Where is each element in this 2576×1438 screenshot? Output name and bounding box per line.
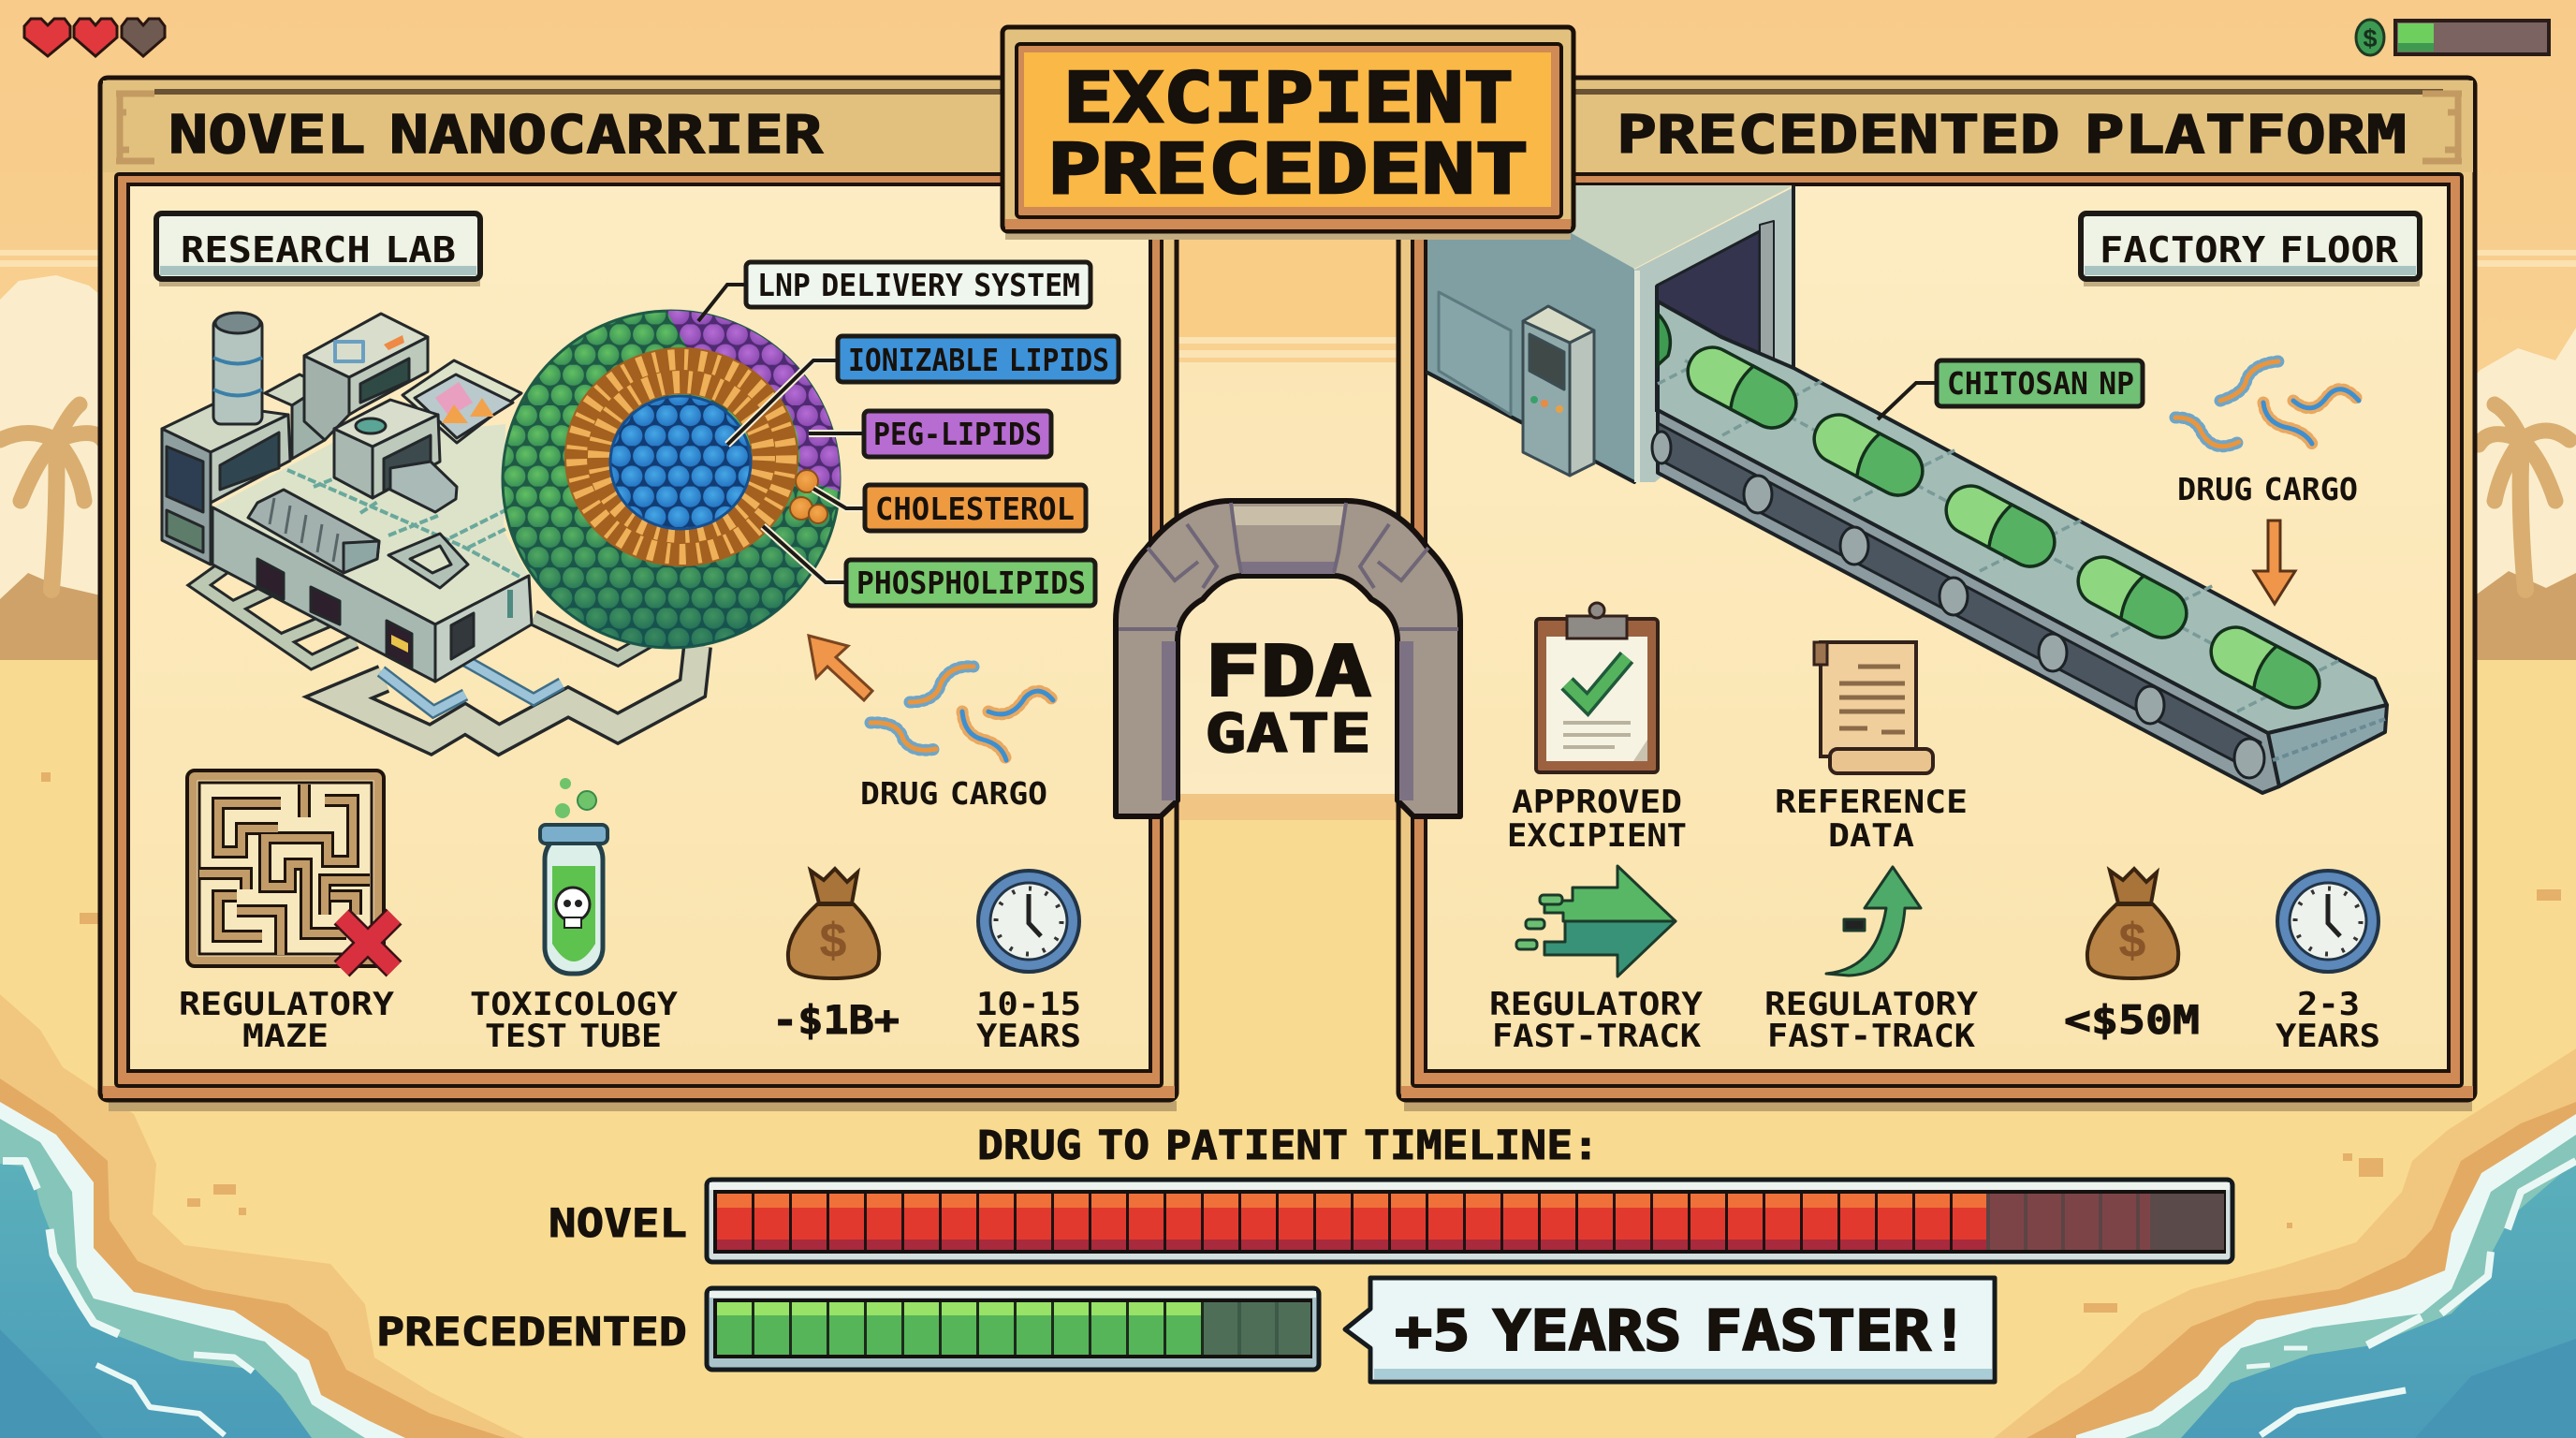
coast: bottom-right sea xyxy=(1994,1049,2576,1438)
heading: timeline: DRUG TO PATIENT TIMELINE: xyxy=(977,1123,1599,1169)
illustration: factory building xyxy=(1427,185,1793,482)
icon: approved excipient clipboard xyxy=(1536,603,1658,772)
control cabinet xyxy=(1523,306,1594,476)
badge: factory floor: FACTORY FLOOR xyxy=(2100,229,2398,271)
label: 10-15 years xyxy=(976,986,1081,1055)
callout: years faster: +5 YEARS FASTER! xyxy=(1395,1299,1969,1364)
icon: reference data scroll xyxy=(1814,642,1933,773)
label: cholesterol: CHOLESTEROL xyxy=(875,491,1075,527)
label: chitosan NP with leader: CHITOSAN NP xyxy=(1947,365,2134,402)
timeline bar: precedented xyxy=(707,1288,1319,1370)
leader lines: LNP labels xyxy=(698,285,865,582)
icon: drug cargo DNA (left) xyxy=(871,667,1053,760)
callout: years faster xyxy=(1345,1278,1995,1382)
panel: precedented platform xyxy=(1398,78,2475,1111)
label: approved excipient: EXCIPIENT xyxy=(1507,817,1687,855)
label: PEG-lipids: PEG-LIPIDS xyxy=(873,416,1042,452)
gate label xyxy=(1205,630,1371,765)
illustration: isometric research lab xyxy=(162,313,697,740)
label: cost novel: -$1B+ xyxy=(772,997,900,1043)
label: regulatory fast-track 1: REGULATORY xyxy=(1489,986,1704,1023)
label: drug cargo (left): DRUG CARGO xyxy=(860,775,1047,812)
HUD: energy bar: $ xyxy=(2363,24,2378,52)
gate label: GATE xyxy=(1205,703,1371,765)
illustration: LNP sphere xyxy=(503,311,840,648)
label: novel row: NOVEL xyxy=(549,1200,687,1246)
HUD: hearts xyxy=(24,19,165,56)
label: approved excipient: APPROVED xyxy=(1512,784,1682,821)
lab pipes xyxy=(199,564,697,740)
label: toxicology test tube xyxy=(470,986,679,1055)
conveyor pills: chitosan NP xyxy=(1658,314,2328,716)
icon: drug cargo DNA (right) xyxy=(2175,361,2359,447)
badge: research lab: RESEARCH LAB xyxy=(181,229,456,271)
label: reference data xyxy=(1775,784,1968,855)
heading: precedented platform: PRECEDENTED PLATFORM xyxy=(1617,105,2407,166)
label: regulatory maze xyxy=(179,986,395,1055)
label: toxicology test tube: TEST TUBE xyxy=(485,1018,662,1055)
label: phospholipids: PHOSPHOLIPIDS xyxy=(856,565,1086,601)
icon: money bag (right) xyxy=(2087,869,2178,978)
lab server rack xyxy=(248,490,379,573)
lab left block xyxy=(162,404,288,452)
label: ionizable lipids: IONIZABLE LIPIDS xyxy=(848,342,1109,378)
title text: EXCIPIENT xyxy=(1063,58,1514,139)
panel: novel nanocarrier xyxy=(100,78,1177,1111)
label: regulatory fast-track 1: FAST-TRACK xyxy=(1492,1018,1702,1055)
lab floor xyxy=(212,424,529,624)
label: 2-3 years xyxy=(2276,986,2380,1055)
arrow: drug cargo into LNP xyxy=(809,636,872,700)
label: regulatory fast-track 2: FAST-TRACK xyxy=(1767,1018,1976,1055)
label: 2-3 years: 2-3 xyxy=(2297,986,2360,1023)
label: 2-3 years: YEARS xyxy=(2276,1018,2380,1055)
gate label: FDA xyxy=(1205,630,1371,712)
icon: fast-track arrow xyxy=(1516,866,1676,976)
badge: factory floor xyxy=(2081,213,2420,286)
label: regulatory maze: REGULATORY xyxy=(179,986,395,1023)
coast: bottom-left sea xyxy=(0,994,524,1438)
illustration: conveyor belt xyxy=(1652,301,2387,793)
label: LNP delivery system: LNP DELIVERY SYSTEM xyxy=(757,267,1080,303)
icon: money bag (left): $ xyxy=(820,914,847,968)
icon: toxicology test tube xyxy=(540,778,607,974)
title plate xyxy=(1003,27,1573,240)
icon: curved fast-track arrow xyxy=(1826,867,1921,976)
icon: money bag (right): $ xyxy=(2119,914,2146,968)
label: reference data: DATA xyxy=(1828,817,1914,855)
lab centre block xyxy=(334,429,373,498)
badge: research lab xyxy=(156,213,480,286)
label: reference data: REFERENCE xyxy=(1775,784,1968,821)
label: drug cargo (right): DRUG CARGO xyxy=(2177,471,2358,507)
label: regulatory fast-track 2: REGULATORY xyxy=(1764,986,1979,1023)
label: chitosan NP with leader xyxy=(1878,360,2143,419)
lab skylight xyxy=(402,360,521,443)
icon: clock (right) xyxy=(2277,871,2378,972)
heading: novel nanocarrier: NOVEL NANOCARRIER xyxy=(168,105,823,166)
label: regulatory fast-track 1 xyxy=(1489,986,1704,1055)
label: 10-15 years: 10-15 xyxy=(976,986,1081,1023)
label: regulatory maze: MAZE xyxy=(242,1018,329,1055)
FDA gate arch xyxy=(1116,501,1460,816)
timeline bar: novel xyxy=(707,1180,2232,1262)
title text: PRECEDENT xyxy=(1047,129,1529,210)
icon: money bag (left) xyxy=(788,869,879,978)
HUD: energy bar xyxy=(2356,20,2549,55)
label: approved excipient xyxy=(1507,784,1687,855)
icon: regulatory maze xyxy=(187,770,394,969)
label: cost precedented: <$50M xyxy=(2064,997,2200,1043)
label: toxicology test tube: TOXICOLOGY xyxy=(470,986,679,1023)
arrow: drug cargo onto belt xyxy=(2254,521,2295,604)
icon: clock (left) xyxy=(978,871,1079,972)
label: precedented row: PRECEDENTED xyxy=(376,1309,687,1355)
title text xyxy=(1047,58,1529,210)
lab upper block xyxy=(304,356,349,440)
label: 10-15 years: YEARS xyxy=(976,1018,1081,1055)
label: regulatory fast-track 2 xyxy=(1764,986,1979,1055)
